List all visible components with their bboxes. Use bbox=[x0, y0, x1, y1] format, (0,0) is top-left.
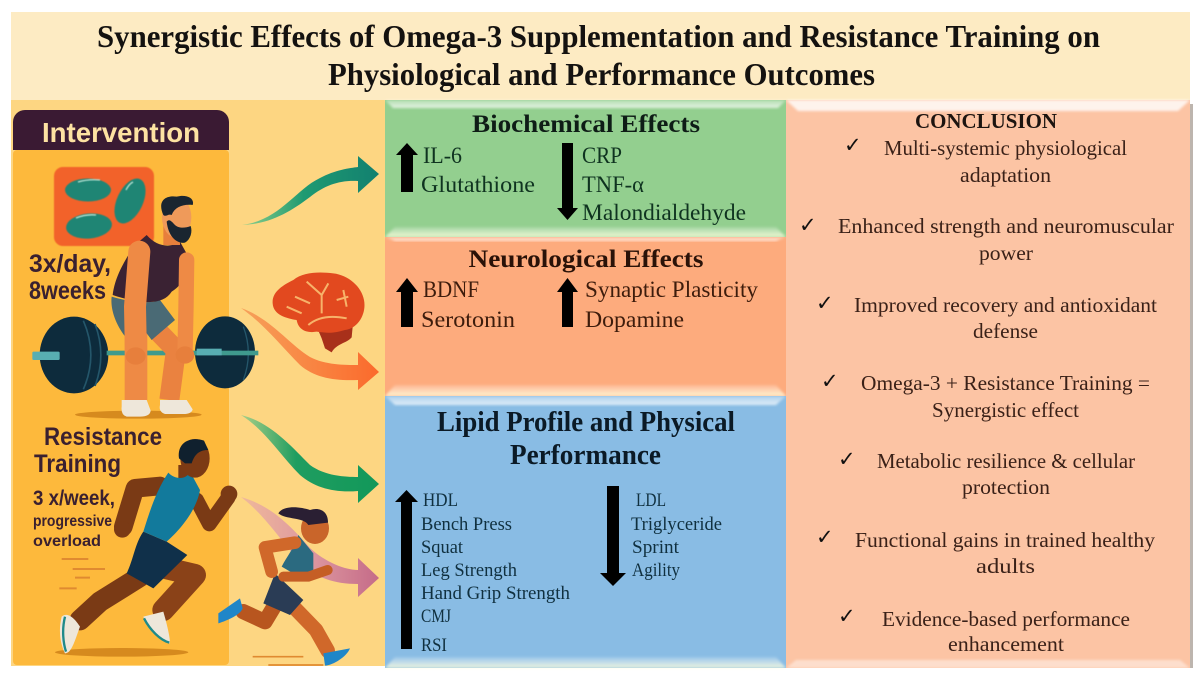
conclusion item 1 bbox=[844, 133, 1127, 187]
conclusion item 4 bbox=[821, 369, 1150, 422]
decreased measures: Triglyceride bbox=[631, 515, 722, 535]
intervention header bbox=[13, 110, 229, 150]
increased measures bbox=[421, 491, 570, 656]
conclusion item 1: adaptation bbox=[960, 163, 1052, 187]
arrow: decrease bbox=[600, 486, 626, 586]
panel: intervention bbox=[11, 100, 386, 666]
panel: lipid profile and physical performance bbox=[385, 396, 786, 668]
heading: lipid profile and physical performance: Lipid Profile and Physical bbox=[437, 407, 735, 438]
increased markers right: Dopamine bbox=[585, 307, 684, 332]
label: resistance training: overload bbox=[33, 533, 101, 550]
increased measures: HDL bbox=[423, 491, 458, 511]
title band bbox=[11, 12, 1190, 100]
conclusion item 1: ✓ bbox=[844, 133, 862, 157]
decreased markers: CRP bbox=[582, 143, 622, 168]
conclusion item 2: power bbox=[979, 241, 1033, 265]
label: resistance training bbox=[33, 423, 162, 550]
conclusion item 3 bbox=[816, 291, 1157, 343]
dosage text: 8weeks bbox=[29, 277, 106, 305]
arrow: increase right bbox=[557, 278, 578, 327]
dosage text: 3x/day, bbox=[29, 250, 111, 278]
conclusion item 6: ✓ bbox=[816, 525, 834, 549]
heading: biochemical effects: Biochemical Effects bbox=[472, 111, 700, 138]
increased markers left: BDNF bbox=[423, 277, 479, 302]
conclusion item 6: Functional gains in trained healthy bbox=[855, 528, 1156, 552]
label: resistance training: Training bbox=[34, 450, 121, 478]
arrow: to physical performance bbox=[241, 497, 379, 597]
increased markers left bbox=[421, 277, 516, 332]
heading: lipid profile and physical performance bbox=[437, 407, 735, 471]
arrow: increase bbox=[396, 143, 418, 192]
conclusion item 4: Synergistic effect bbox=[932, 398, 1079, 422]
dosage text bbox=[29, 250, 111, 305]
illustration: brain bbox=[273, 272, 364, 352]
title text bbox=[97, 18, 1100, 92]
increased measures: Bench Press bbox=[421, 515, 512, 535]
increased markers: IL-6 bbox=[423, 143, 462, 168]
decreased measures bbox=[631, 491, 722, 581]
increased markers left: Serotonin bbox=[421, 307, 516, 332]
conclusion item 4: Omega-3 + Resistance Training = bbox=[861, 371, 1150, 395]
decreased measures: LDL bbox=[636, 491, 666, 511]
illustration: male runner bbox=[55, 400, 237, 657]
increased measures: CMJ bbox=[421, 607, 451, 627]
conclusion item 2 bbox=[799, 213, 1174, 265]
panel: conclusion bbox=[786, 100, 1193, 668]
increased measures: Squat bbox=[421, 538, 464, 558]
title text: Synergistic Effects of Omega-3 Supplementation and Resistance Training on bbox=[97, 18, 1100, 54]
conclusion item 2: ✓ bbox=[799, 213, 817, 237]
conclusion item 3: Improved recovery and antioxidant bbox=[854, 293, 1157, 317]
conclusion item 5: Metabolic resilience & cellular bbox=[877, 449, 1135, 473]
conclusion item 6 bbox=[816, 525, 1156, 578]
heading: neurological effects: Neurological Effects bbox=[468, 246, 704, 273]
arrow: to biochemical effects bbox=[242, 156, 379, 225]
conclusion item 7: enhancement bbox=[948, 632, 1064, 656]
decreased measures: Agility bbox=[632, 561, 681, 581]
conclusion item 5 bbox=[838, 447, 1135, 499]
conclusion item 5: protection bbox=[962, 475, 1051, 499]
conclusion item 7: Evidence-based performance bbox=[882, 607, 1130, 631]
conclusion item 2: Enhanced strength and neuromuscular bbox=[838, 214, 1174, 238]
arrow: increase left bbox=[396, 278, 418, 327]
panel: biochemical effects bbox=[385, 100, 786, 237]
conclusion item 3: ✓ bbox=[816, 291, 834, 315]
label: resistance training: Resistance bbox=[44, 423, 162, 451]
icon: omega-3 capsules bbox=[54, 167, 154, 246]
conclusion item 7: ✓ bbox=[838, 604, 856, 628]
arrow: increase bbox=[395, 490, 418, 649]
decreased markers: Malondialdehyde bbox=[582, 200, 746, 225]
arrow: decrease bbox=[557, 143, 578, 220]
increased markers: Glutathione bbox=[421, 172, 535, 197]
increased markers right bbox=[585, 277, 758, 332]
decreased markers bbox=[582, 143, 746, 225]
decreased measures: Sprint bbox=[632, 538, 680, 558]
illustration: man deadlifting barbell bbox=[32, 196, 258, 400]
illustration: female runner bbox=[218, 507, 350, 666]
conclusion item 4: ✓ bbox=[821, 369, 839, 393]
increased measures: Leg Strength bbox=[421, 561, 517, 581]
arrow: to lipid profile bbox=[241, 415, 379, 503]
label: resistance training: progressive bbox=[33, 513, 112, 530]
conclusion item 3: defense bbox=[973, 319, 1038, 343]
increased measures: Hand Grip Strength bbox=[421, 584, 570, 604]
increased markers right: Synaptic Plasticity bbox=[585, 277, 758, 302]
panel: neurological effects bbox=[385, 237, 786, 396]
label: resistance training: 3 x/week, bbox=[33, 487, 115, 510]
conclusion item 6: adults bbox=[976, 554, 1035, 578]
conclusion item 5: ✓ bbox=[838, 447, 856, 471]
arrow: to neurological effects bbox=[241, 308, 379, 390]
decreased markers: TNF-α bbox=[582, 172, 644, 197]
intervention header: Intervention bbox=[42, 117, 200, 148]
title text: Physiological and Performance Outcomes bbox=[328, 56, 875, 92]
conclusion item 7 bbox=[838, 604, 1130, 656]
heading: conclusion: CONCLUSION bbox=[915, 109, 1057, 133]
increased markers bbox=[421, 143, 535, 197]
conclusion item 1: Multi-systemic physiological bbox=[884, 136, 1127, 160]
heading: lipid profile and physical performance: Performance bbox=[510, 440, 661, 471]
increased measures: RSI bbox=[421, 636, 447, 656]
